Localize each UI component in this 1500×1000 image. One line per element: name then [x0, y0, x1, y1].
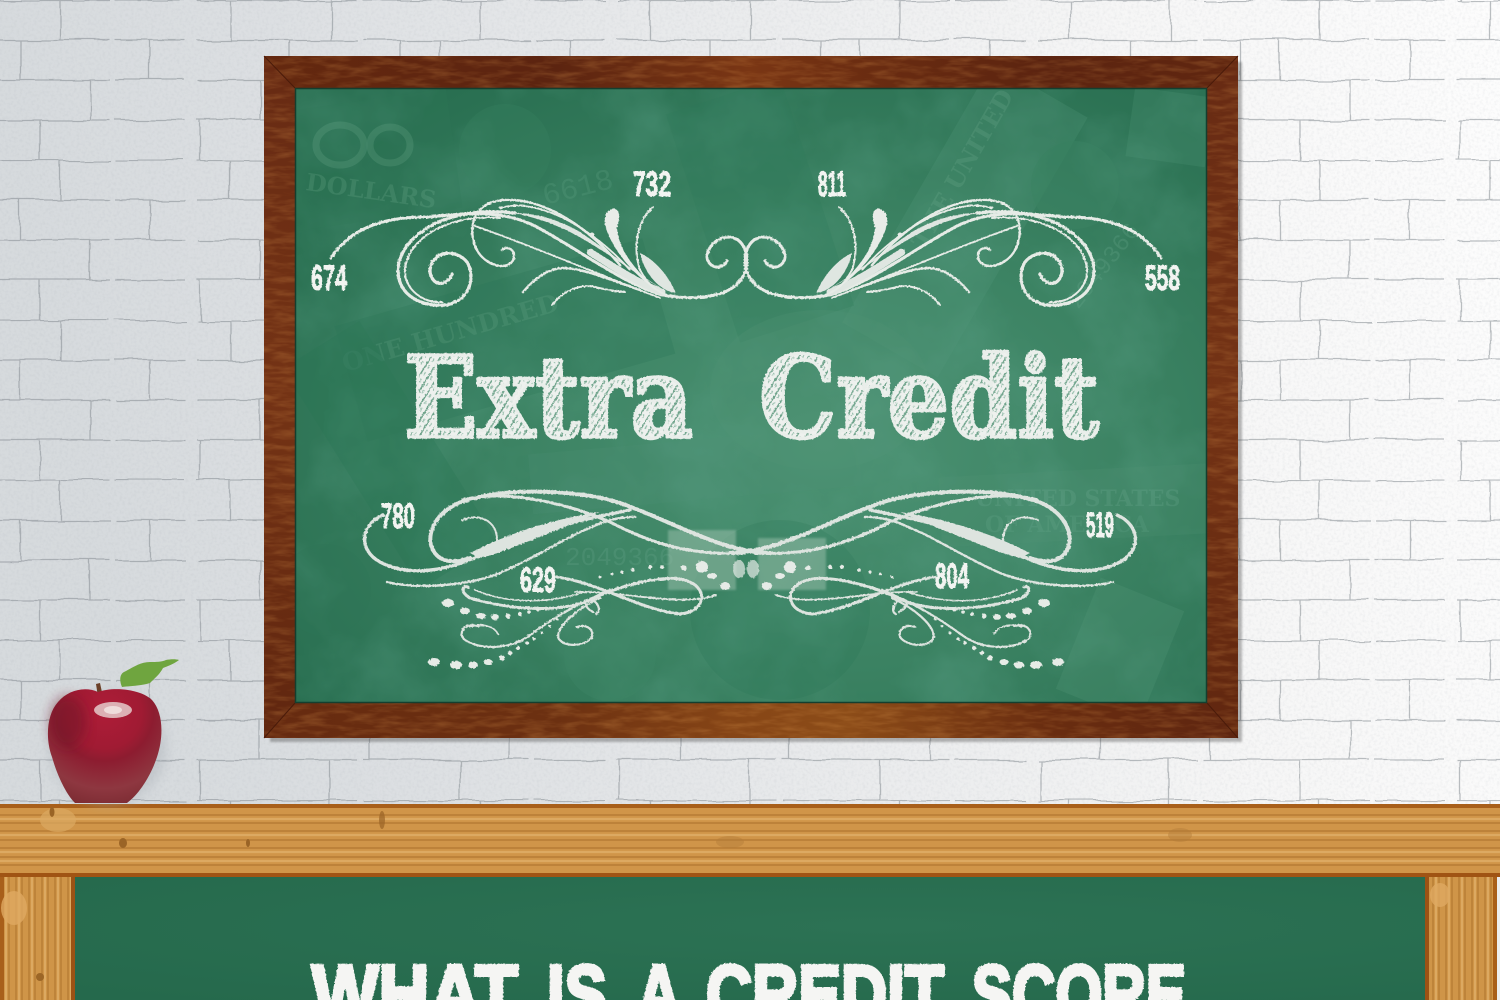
title: Extra Credit: Extra [404, 333, 693, 464]
green board surface with faint banknote background [277, 63, 1222, 722]
apple leaf [115, 659, 179, 695]
upper right flourish [745, 200, 1161, 305]
faint banknotes: 2049366 [565, 543, 674, 573]
lower right flourish [730, 492, 1135, 669]
faint banknotes: THE UNITED [905, 84, 1019, 253]
credit score numbers: 804 [935, 557, 969, 596]
faint banknotes: DOLLARS [304, 167, 438, 214]
left wooden post [0, 877, 75, 1000]
chalkboard with wooden frame [264, 56, 1242, 742]
upper ribbons [730, 492, 1135, 586]
credit score numbers: 519 [1086, 506, 1114, 545]
upper left flourish [331, 200, 747, 305]
credit score numbers: 629 [520, 561, 556, 600]
lower left flourish [365, 492, 770, 669]
right wooden post [1425, 877, 1497, 1000]
faint banknotes: 2049366 [1063, 219, 1146, 315]
credit score numbers: 558 [1145, 259, 1180, 298]
faint banknotes [277, 63, 1222, 722]
credit score numbers: 780 [381, 497, 415, 536]
faint banknotes: ONE HUNDRED [339, 288, 562, 378]
apple stem [96, 683, 103, 697]
title: Extra Credit [404, 333, 1099, 464]
credit score numbers [311, 165, 1180, 600]
lower scrolls and dots [776, 565, 1064, 669]
heading: what is a credit score [312, 949, 1186, 1000]
icon: red apple [48, 659, 179, 804]
credit score numbers: 732 [633, 165, 671, 204]
faint banknotes: UNITED STATES [975, 486, 1180, 512]
credit score numbers: 674 [311, 259, 347, 298]
board inner shadow [296, 88, 1206, 702]
wooden frame [264, 56, 1238, 738]
credit score numbers: 811 [818, 165, 846, 204]
title: Extra Credit: Credit [759, 333, 1099, 464]
faint banknotes: 6618 [539, 164, 617, 215]
faint banknotes: OF AMERICA [985, 512, 1150, 538]
lower chalkboard panel [75, 877, 1425, 1000]
lower centre chalk smudge bow [668, 530, 826, 590]
wooden shelf [0, 804, 1500, 877]
